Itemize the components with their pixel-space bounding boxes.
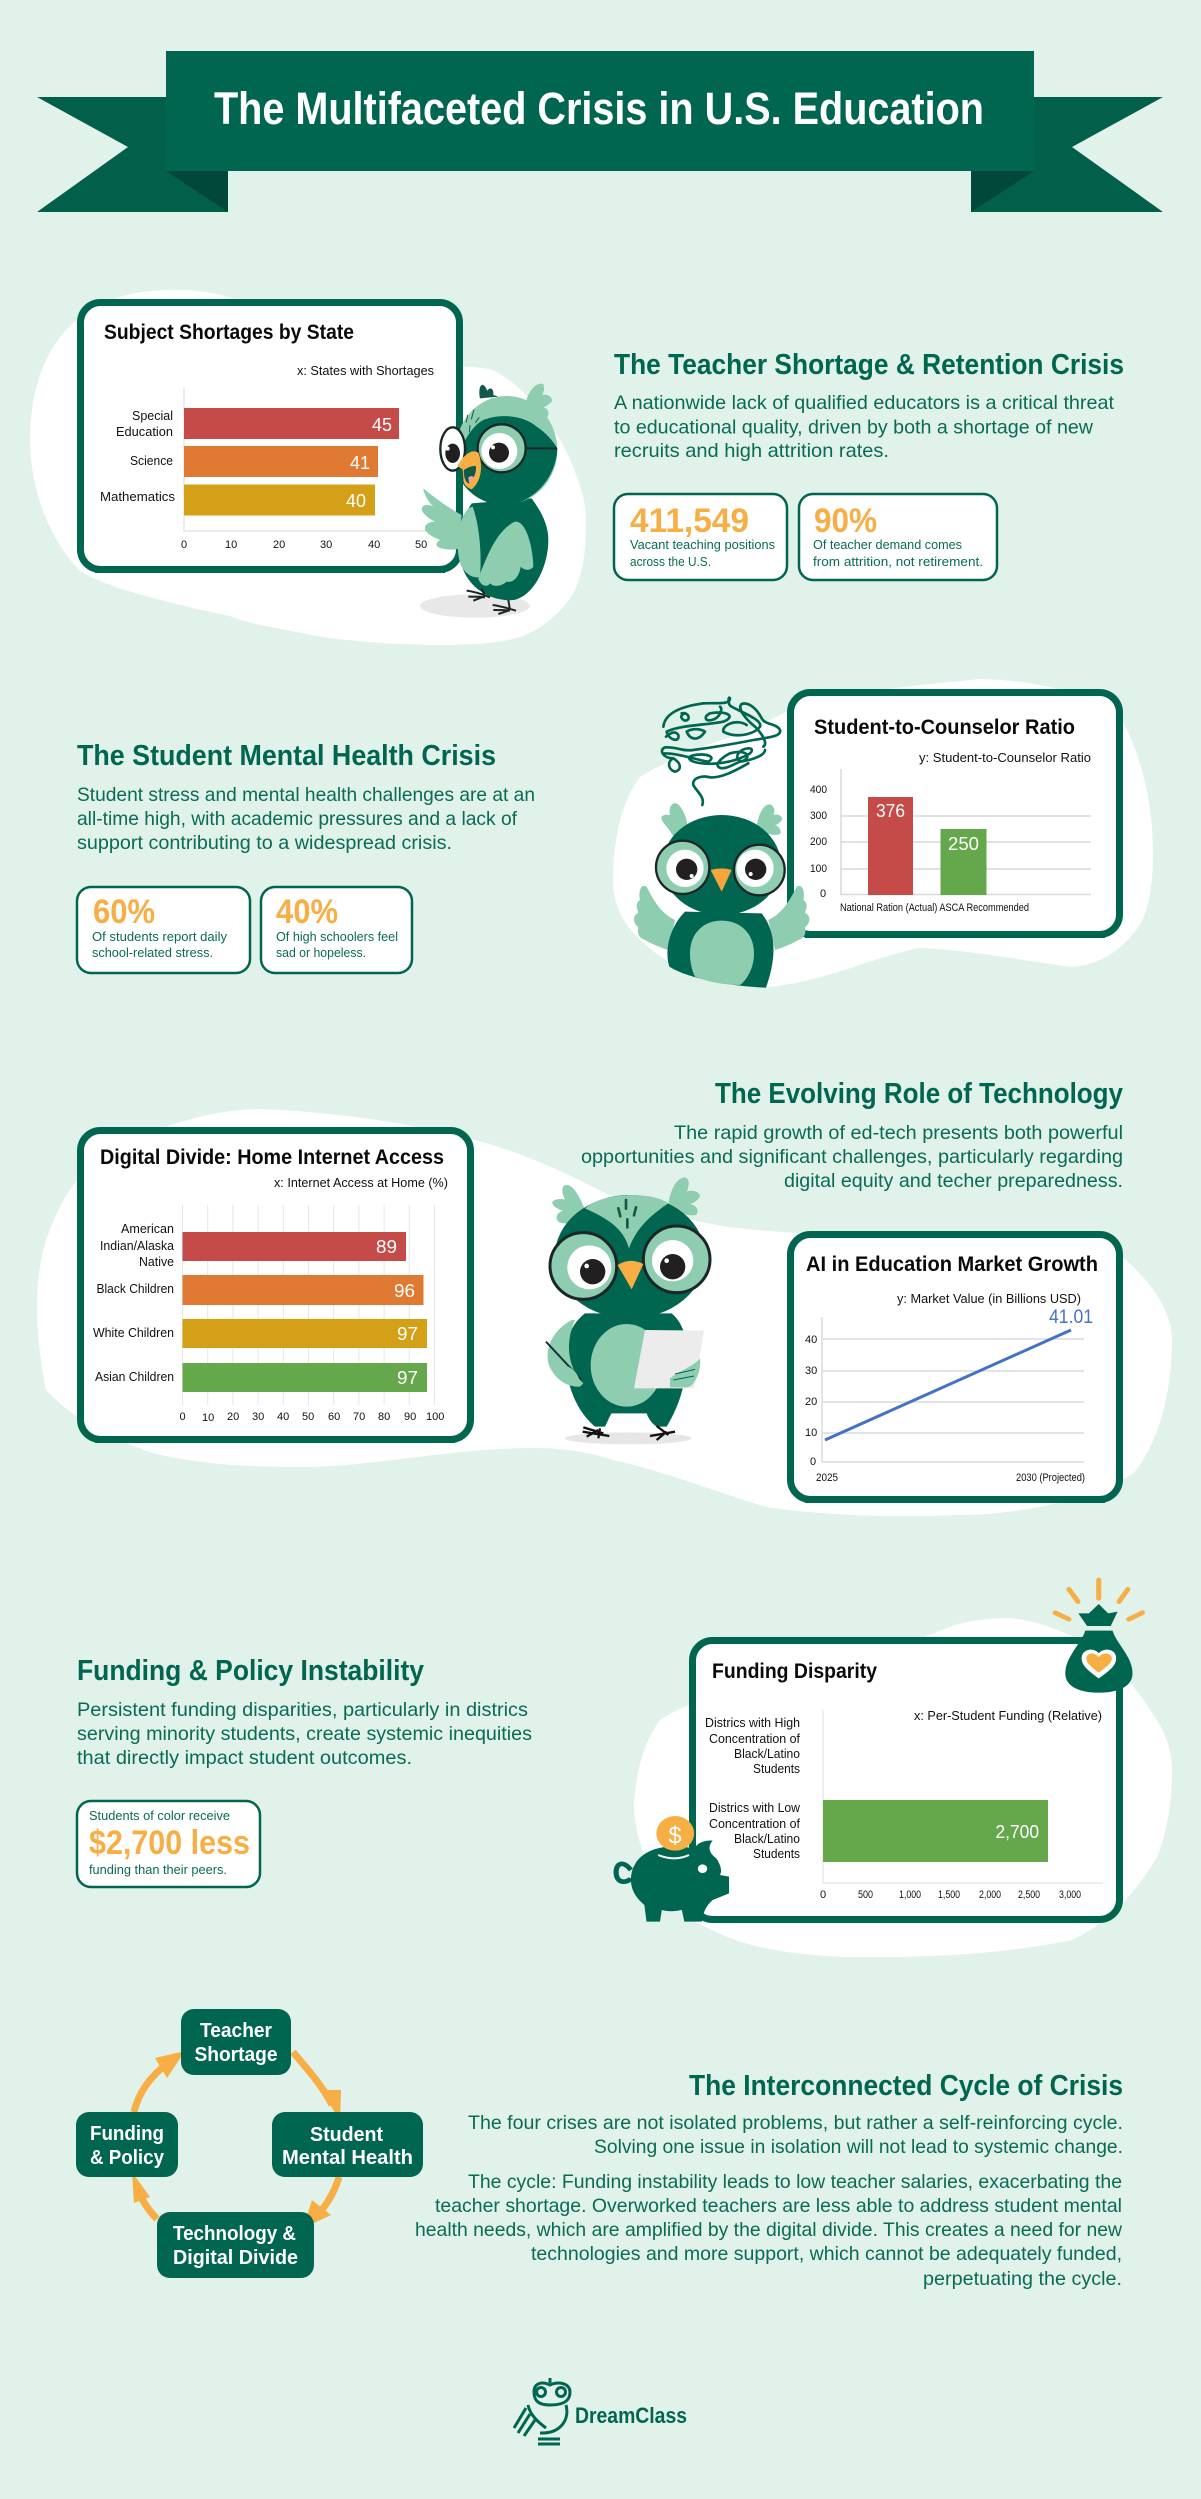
panel: interconnected cycle <box>76 2009 1123 2290</box>
chart: subject shortages by state: 20 <box>273 539 285 551</box>
heading: mental health: The Student Mental Health Crisis <box>77 740 496 772</box>
chart: digital divide: Digital Divide: Home Internet Access <box>100 1146 444 1169</box>
stat: funding gap: $2,700 less <box>89 1824 250 1862</box>
icon: piggy bank with coin: $ <box>668 1822 682 1849</box>
text block: cycle: The cycle: Funding instability leads to low teacher salaries, exacerbating the <box>468 2171 1122 2193</box>
stat: attrition: Of teacher demand comes <box>813 537 962 552</box>
icon: piggy bank with coin <box>616 1816 729 1922</box>
chart: student-to-counselor ratio: 0 <box>820 888 826 900</box>
icon: worried owl <box>634 803 809 988</box>
arrow: student to technology <box>303 2177 339 2228</box>
chart: AI market growth: 40 <box>805 1334 817 1346</box>
chart: funding disparity: Concentration of <box>709 1731 800 1746</box>
chart: funding disparity: Black/Latino <box>734 1831 800 1846</box>
chart: AI market growth: AI in Education Market Growth <box>806 1253 1098 1276</box>
title: The Multifaceted Crisis in U.S. Education <box>214 83 984 134</box>
icon: tangled thought scribble <box>662 698 780 805</box>
chart: subject shortages by state <box>80 302 460 573</box>
chart: funding disparity: Black/Latino <box>734 1746 800 1761</box>
node: funding and policy: Funding <box>90 2123 164 2145</box>
chart: subject shortages by state: x: States with Shortages <box>297 363 434 378</box>
heading: technology: The Evolving Role of Technology <box>715 1078 1123 1110</box>
chart: funding disparity: Funding Disparity <box>712 1660 877 1683</box>
stat: sad or hopeless <box>261 887 412 973</box>
chart: digital divide: 50 <box>302 1411 314 1423</box>
chart: funding disparity: Districs with High <box>705 1715 800 1730</box>
stat: daily stress: Of students report daily <box>92 929 227 944</box>
chart: funding disparity: x: Per-Student Funding (Relative) <box>914 1708 1102 1723</box>
node: teacher shortage <box>181 2009 291 2075</box>
chart: digital divide: 70 <box>353 1411 365 1423</box>
chart: digital divide: American <box>121 1221 174 1236</box>
chart: student-to-counselor ratio: 300 <box>810 810 827 822</box>
chart: AI market growth: 20 <box>805 1396 817 1408</box>
text block: mental health <box>77 784 535 854</box>
heading: funding: Funding & Policy Instability <box>77 1655 424 1687</box>
arrow: funding to teacher <box>134 2051 185 2112</box>
chart: AI market growth: 0 <box>810 1456 816 1468</box>
chart: AI market growth: 2030 (Projected) <box>1016 1472 1085 1484</box>
chart: subject shortages by state: 0 <box>181 539 187 551</box>
chart: funding disparity: Students <box>753 1846 800 1861</box>
stat: daily stress <box>77 887 250 973</box>
node: technology and digital divide <box>157 2212 314 2278</box>
panel: student mental health <box>77 679 1153 988</box>
chart: AI market growth: y: Market Value (in Billions USD) <box>897 1291 1081 1306</box>
chart: funding disparity: 0 <box>820 1889 826 1901</box>
chart: subject shortages by state: Mathematics <box>100 489 175 504</box>
chart: subject shortages by state: Subject Shortages by State <box>104 321 354 344</box>
chart: subject shortages by state: Education <box>116 424 173 439</box>
logo: DreamClass: DreamClass <box>575 2403 687 2428</box>
text block: technology <box>581 1122 1123 1192</box>
text block: cycle: health needs, which are amplified by the digital divide. This creates a need for new <box>415 2219 1123 2241</box>
node: teacher shortage: Teacher <box>200 2020 272 2042</box>
chart: funding disparity: Districs with Low <box>709 1800 801 1815</box>
chart: digital divide: 90 <box>404 1411 416 1423</box>
chart: subject shortages by state: Science <box>130 453 173 468</box>
chart: subject shortages by state: 50 <box>415 539 427 551</box>
chart: funding disparity: 2,000 <box>979 1889 1001 1901</box>
text block: teacher shortage: recruits and high attrition rates. <box>614 440 889 462</box>
panel: teacher shortage <box>30 290 1124 645</box>
chart: digital divide: Black Children <box>96 1281 174 1296</box>
stat: daily stress: school-related stress. <box>92 945 213 960</box>
stat: sad or hopeless: Of high schoolers feel <box>276 929 398 944</box>
chart: subject shortages by state: 41 <box>350 453 370 473</box>
chart: funding disparity: 3,000 <box>1059 1889 1081 1901</box>
chart: digital divide: 60 <box>328 1411 340 1423</box>
panel: technology <box>37 1078 1172 1516</box>
heading: teacher shortage: The Teacher Shortage & Retention Crisis <box>614 349 1124 381</box>
chart: digital divide: 20 <box>227 1411 239 1423</box>
chart: AI market growth: 30 <box>805 1365 817 1377</box>
chart: student-to-counselor ratio: 250 <box>948 834 979 854</box>
stat: funding gap: Students of color receive <box>89 1808 230 1823</box>
chart: funding disparity <box>692 1640 1120 1920</box>
node: student mental health: Mental Health <box>282 2147 413 2169</box>
text block: technology: opportunities and significant challenges, particularly regarding <box>581 1146 1123 1168</box>
chart: funding disparity: 2,700 <box>996 1822 1039 1842</box>
stat: sad or hopeless: 40% <box>276 893 338 931</box>
chart: digital divide: 10 <box>202 1412 214 1424</box>
node: funding and policy: & Policy <box>90 2147 165 2169</box>
chart: subject shortages by state: 40 <box>368 539 380 551</box>
chart: student-to-counselor ratio <box>790 692 1120 938</box>
node: technology and digital divide: Digital Divide <box>173 2247 298 2269</box>
chart: student-to-counselor ratio: 100 <box>810 863 827 875</box>
text block: mental health: support contributing to a widespread crisis. <box>77 832 452 854</box>
chart: digital divide: 100 <box>426 1411 444 1423</box>
node: technology and digital divide: Technology & <box>173 2223 296 2245</box>
chart: digital divide: White Children <box>93 1325 174 1340</box>
stat: attrition: 90% <box>814 502 877 540</box>
stat: daily stress: 60% <box>93 893 155 931</box>
icon: owl pointing at chart <box>420 384 557 618</box>
text block: funding: that directly impact student outcomes. <box>77 1747 412 1769</box>
arrow: teacher to student <box>293 2052 341 2122</box>
text block: mental health: Student stress and mental health challenges are at an <box>77 784 535 806</box>
chart: funding disparity: Students <box>753 1761 800 1776</box>
arrow: technology to funding <box>132 2172 157 2219</box>
panel: funding <box>77 1580 1172 1957</box>
chart: digital divide: 30 <box>252 1411 264 1423</box>
chart: student-to-counselor ratio: 376 <box>876 801 905 821</box>
chart: digital divide <box>80 1130 470 1443</box>
text block: cycle: Solving one issue in isolation will not lead to systemic change. <box>594 2136 1123 2158</box>
chart: student-to-counselor ratio: National Ration (Actual) ASCA Recommended <box>840 902 1029 914</box>
text block: technology: digital equity and techer preparedness. <box>784 1170 1123 1192</box>
heading: cycle: The Interconnected Cycle of Crisis <box>689 2070 1123 2102</box>
chart: subject shortages by state: Special <box>132 408 173 423</box>
chart: digital divide: 97 <box>397 1324 418 1344</box>
text block: cycle: The four crises are not isolated problems, but rather a self-reinforcing cycle. <box>468 2112 1123 2134</box>
chart: funding disparity: 1,000 <box>899 1889 921 1901</box>
text block: mental health: all-time high, with academic pressures and a lack of <box>77 808 518 830</box>
chart: AI market growth: 41.01 <box>1049 1307 1093 1328</box>
text block: teacher shortage: A nationwide lack of qualified educators is a critical threat <box>614 392 1115 414</box>
chart: AI market growth: 10 <box>805 1427 817 1439</box>
stat: vacant positions <box>614 494 787 580</box>
chart: digital divide: 0 <box>180 1411 186 1423</box>
stat: vacant positions: 411,549 <box>630 502 749 540</box>
chart: AI market growth <box>790 1234 1120 1503</box>
chart: funding disparity: Concentration of <box>709 1816 800 1831</box>
stat: vacant positions: Vacant teaching positions <box>630 537 775 552</box>
stat: vacant positions: across the U.S. <box>630 554 711 569</box>
text block: cycle: technologies and more support, which cannot be adequately funded, <box>531 2243 1122 2265</box>
node: funding and policy <box>76 2112 178 2177</box>
diagram: cycle of crisis <box>76 2009 423 2278</box>
icon: owl with notepad <box>546 1177 710 1444</box>
stat: funding gap: funding than their peers. <box>89 1862 227 1877</box>
node: student mental health: Student <box>310 2124 383 2146</box>
text block: technology: The rapid growth of ed-tech presents both powerful <box>674 1122 1123 1144</box>
chart: funding disparity: 1,500 <box>938 1889 960 1901</box>
chart: digital divide: 89 <box>376 1237 397 1257</box>
chart: student-to-counselor ratio: Student-to-Counselor Ratio <box>814 716 1075 739</box>
stat: attrition <box>799 494 997 580</box>
chart: digital divide: 97 <box>397 1368 418 1388</box>
chart: digital divide: Native <box>139 1254 174 1269</box>
chart: subject shortages by state: 40 <box>346 491 366 511</box>
chart: funding disparity: 2,500 <box>1018 1889 1040 1901</box>
text block: cycle: teacher shortage. Overworked teachers are less able to address student mental <box>435 2195 1122 2217</box>
chart: subject shortages by state: 45 <box>372 415 392 435</box>
text block: cycle: perpetuating the cycle. <box>923 2268 1122 2290</box>
text block: teacher shortage <box>614 392 1115 462</box>
chart: digital divide: Indian/Alaska <box>100 1238 175 1253</box>
chart: student-to-counselor ratio: y: Student-to-Counselor Ratio <box>919 750 1091 765</box>
chart: digital divide: x: Internet Access at Home (%) <box>274 1175 448 1190</box>
chart: digital divide: Asian Children <box>95 1369 174 1384</box>
chart: digital divide: 96 <box>394 1281 415 1301</box>
chart: funding disparity: 500 <box>858 1889 873 1901</box>
title banner <box>37 51 1163 212</box>
text block: funding: Persistent funding disparities, particularly in districs <box>77 1699 528 1721</box>
chart: student-to-counselor ratio: 400 <box>810 784 827 796</box>
stat: funding gap <box>77 1801 260 1887</box>
chart: subject shortages by state: 10 <box>225 539 237 551</box>
node: teacher shortage: Shortage <box>194 2044 278 2066</box>
text block: funding <box>77 1699 532 1769</box>
icon: money bag with heart <box>1055 1580 1142 1693</box>
text block: cycle <box>415 2112 1123 2290</box>
stat: attrition: from attrition, not retirement. <box>813 554 983 569</box>
node: student mental health <box>272 2112 423 2177</box>
chart: subject shortages by state: 30 <box>320 539 332 551</box>
chart: digital divide: 40 <box>277 1411 289 1423</box>
logo: DreamClass <box>514 2378 687 2444</box>
chart: student-to-counselor ratio: 200 <box>810 836 827 848</box>
text block: teacher shortage: to educational quality, driven by both a shortage of new <box>614 416 1094 438</box>
stat: sad or hopeless: sad or hopeless. <box>276 945 366 960</box>
text block: funding: serving minority students, create systemic inequities <box>77 1723 532 1745</box>
chart: AI market growth: 2025 <box>816 1472 838 1484</box>
chart: digital divide: 80 <box>378 1411 390 1423</box>
